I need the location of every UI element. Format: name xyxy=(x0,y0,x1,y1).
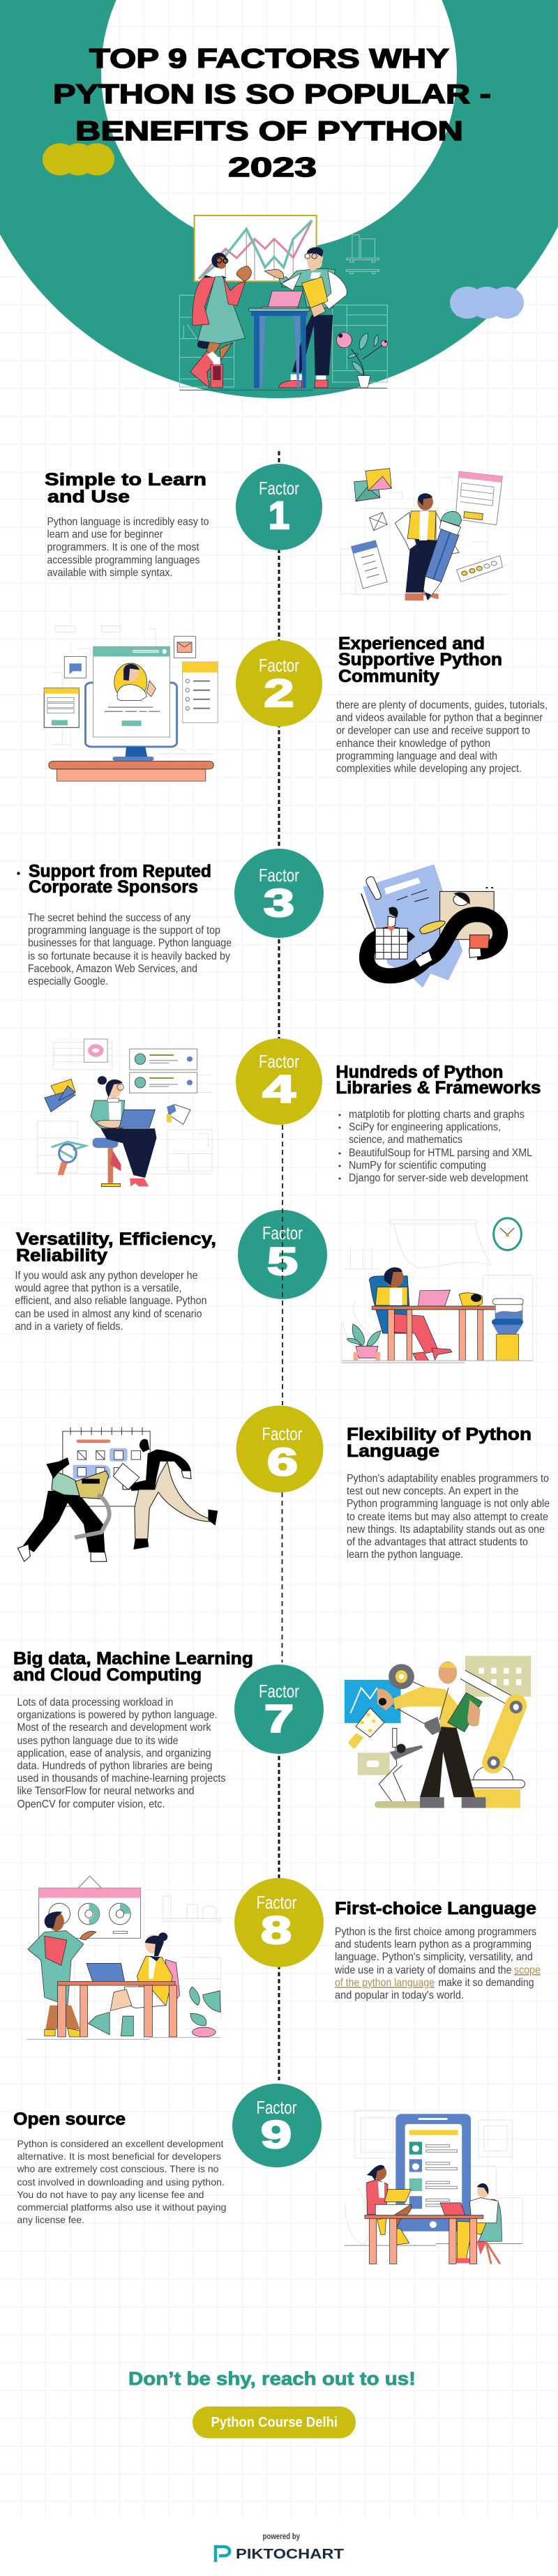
factor 4 text: Hundreds of Python xyxy=(336,1063,504,1082)
factor badge 6 xyxy=(236,1406,324,1492)
decorative yellow blob xyxy=(43,144,114,176)
factor badge 5: Factor xyxy=(262,1222,303,1243)
factor 6 text: test out new concepts. An expert in the xyxy=(347,1485,519,1497)
factor 5 text: and in a variety of fields. xyxy=(15,1321,123,1333)
factor 4 text: SciPy for engineering applications, xyxy=(349,1121,501,1133)
factor 3 text: programming language is the support of top xyxy=(28,925,220,937)
factor 2 text: programming language and deal with xyxy=(336,750,497,762)
timeline: dashed connector, factors 1 to 4 xyxy=(278,451,280,1038)
factor 6 text: Flexibility of Python xyxy=(347,1425,531,1444)
title xyxy=(53,44,491,183)
factor 8 text: and students learn python as a programming xyxy=(335,1939,531,1950)
factor 2 text: Supportive Python xyxy=(338,650,502,669)
factor 5 text: efficient, and also reliable language. Python xyxy=(15,1295,206,1307)
factor 1 text: available with simple syntax. xyxy=(47,567,173,579)
factor 1 text: learn and use for beginner xyxy=(47,529,163,540)
factor 2 text xyxy=(336,634,548,775)
timeline: dashed connector, factors 7 to 9 xyxy=(278,1756,280,2080)
factor badge 9: 9 xyxy=(261,2112,292,2156)
factor 3 illustration: handshake partners xyxy=(361,864,500,988)
button: Python Course Delhi xyxy=(193,2407,356,2438)
factor 2 text: Community xyxy=(338,667,439,686)
factor badge 3 xyxy=(234,849,324,938)
factor badge 2: 2 xyxy=(264,671,294,715)
factor 4 illustration: woman on laptop with library cards xyxy=(36,1039,212,1187)
factor badge 6: Factor xyxy=(262,1423,303,1444)
factor 8 text: language. Python's simplicity, versatility, and xyxy=(335,1951,533,1963)
factor 4 text: Django for server-side web development xyxy=(349,1172,529,1184)
factor 1 text xyxy=(45,470,209,579)
factor 9 text: Python is considered an excellent development xyxy=(17,2138,224,2149)
factor 5 text: If you would ask any python developer he xyxy=(15,1270,198,1282)
factor badge 2: Factor xyxy=(259,655,299,676)
factor 2 text: or developer can use and receive support to xyxy=(336,725,530,736)
factor 3 text: businesses for that language. Python language xyxy=(28,937,232,949)
factor 4 text: science, and mathematics xyxy=(349,1134,462,1146)
factor 8 text: First-choice Language xyxy=(335,1899,536,1918)
factor badge 9 xyxy=(232,2084,322,2167)
factor 7 text: application, ease of analysis, and organizing xyxy=(17,1748,211,1759)
factor 8 text: Python is the first choice among programmers xyxy=(335,1926,536,1938)
factor 5 text: Reliability xyxy=(16,1245,107,1265)
factor 1 text: and Use xyxy=(47,487,130,506)
factor 9 text: alternative. It is most beneficial for developers xyxy=(17,2151,221,2162)
factor 3 text: especially Google. xyxy=(28,976,108,987)
factor badge 4: Factor xyxy=(259,1051,299,1072)
factor badge 7: 7 xyxy=(264,1696,294,1741)
factor 3 text: The secret behind the success of any xyxy=(28,912,190,924)
factor 6 text xyxy=(347,1425,550,1561)
factor badge 4 xyxy=(236,1038,322,1125)
factor 8 text: wide use in a variety of domains and the xyxy=(334,1964,512,1976)
factor 4 text: matplotib for plotting charts and graphs xyxy=(349,1109,525,1121)
hero illustration: two colleagues at a chart board xyxy=(179,215,388,390)
factor 9 illustration: two people with giant phone xyxy=(345,2111,522,2264)
factor 8 text: and popular in today's world. xyxy=(335,1990,464,2001)
factor 7 illustration: engineer with robot arm xyxy=(345,1656,531,1808)
factor 2 illustration: profile on monitor xyxy=(44,626,218,781)
factor badge 1: Factor xyxy=(259,478,299,499)
factor badge 9: Factor xyxy=(257,2097,297,2118)
title: 2023 xyxy=(228,153,317,183)
factor 5 text: can be used in almost any kind of scenario xyxy=(15,1308,202,1320)
factor 1 text: Simple to Learn xyxy=(45,470,206,490)
factor 7 text: Most of the research and development work xyxy=(17,1722,211,1734)
title: BENEFITS OF PYTHON xyxy=(75,116,463,146)
title: TOP 9 FACTORS WHY xyxy=(89,44,449,74)
footer: powered by Piktochart: PIKTOCHART xyxy=(236,2547,344,2562)
factor 1 text: accessible programming languages xyxy=(47,554,200,566)
factor 9 text: commercial platforms also use it without paying xyxy=(17,2202,227,2213)
factor badge 3: 3 xyxy=(264,881,294,925)
factor badge 1 xyxy=(236,464,322,550)
factor badge 8 xyxy=(234,1878,324,1967)
factor 2 text: Experienced and xyxy=(338,634,485,653)
factor 6 text: learn the python language. xyxy=(347,1549,463,1561)
factor 7 text: uses python language due to its wide xyxy=(17,1735,179,1747)
factor 4 text: Libraries & Frameworks xyxy=(336,1078,541,1098)
factor badge 8: 8 xyxy=(261,1908,292,1952)
factor 7 text: OpenCV for computer vision, etc. xyxy=(17,1798,165,1810)
factor 7 text: and Cloud Computing xyxy=(13,1665,202,1685)
factor 3 text xyxy=(17,862,232,987)
factor 4 text xyxy=(336,1063,541,1184)
factor badge 1: 1 xyxy=(269,493,289,537)
footer: white band xyxy=(0,2520,558,2576)
decorative blue blob xyxy=(450,287,524,319)
factor 9 text: You do not have to pay any license fee and xyxy=(17,2189,204,2200)
factor 9 text: cost involved in downloading and using python. xyxy=(17,2176,225,2188)
factor 5 illustration: woman at desk xyxy=(342,1218,533,1363)
factor 4 text: NumPy for scientific computing xyxy=(349,1160,486,1172)
factor 3 text: is so fortunate because it is heavily backed by xyxy=(28,950,230,962)
button: Python Course Delhi: Python Course Delhi xyxy=(211,2415,338,2430)
factor badge 8: Factor xyxy=(257,1892,297,1913)
factor 2 text: and videos available for python that a beginner xyxy=(336,712,543,724)
factor 5 text: Versatility, Efficiency, xyxy=(16,1229,216,1249)
factor 2 text: enhance their knowledge of python xyxy=(336,738,490,750)
factor 3 text: Facebook, Amazon Web Services, and xyxy=(28,963,197,975)
factor 7 text: like TensorFlow for neural networks and xyxy=(17,1785,194,1797)
factor badge 7: Factor xyxy=(259,1681,299,1702)
factor 5 text: would agree that python is a versatile, xyxy=(15,1282,182,1294)
footer: powered by Piktochart xyxy=(216,2533,344,2562)
factor 3 text: Support from Reputed xyxy=(29,862,211,881)
factor badge 5: 5 xyxy=(267,1239,298,1283)
factor 1 text: programmers. It is one of the most xyxy=(47,541,199,554)
factor badge 6: 6 xyxy=(267,1439,298,1484)
factor 7 text: data. Hundreds of python libraries are being xyxy=(17,1760,212,1772)
factor 8 text: make it so demanding xyxy=(438,1977,534,1989)
factor badge 2 xyxy=(236,640,322,727)
factor 3 text: Corporate Sponsors xyxy=(29,877,198,897)
factor 7 text: Big data, Machine Learning xyxy=(13,1649,253,1668)
factor 7 text: organizations is powered by python language. xyxy=(17,1709,218,1721)
factor 6 text: Language xyxy=(347,1441,439,1461)
factor 5 text xyxy=(15,1229,216,1333)
factor 2 text: complexities while developing any project. xyxy=(336,763,522,775)
footer: powered by Piktochart: powered by xyxy=(262,2533,301,2541)
factor 7 text: used in thousands of machine-learning projects xyxy=(17,1773,226,1785)
factor 9 text xyxy=(13,2109,227,2225)
factor 9 text: who are extremely cost conscious. There is no xyxy=(16,2163,219,2174)
factor 9 text: any license fee. xyxy=(17,2214,84,2225)
factor 8 illustration: two women presenting charts xyxy=(27,1876,220,2039)
factor 8 text: of the python language xyxy=(335,1977,435,1989)
factor 6 text: of the advantages that attract students to xyxy=(347,1536,528,1548)
factor 1 text: Python language is incredibly easy to xyxy=(47,516,209,528)
hero background: teal ring xyxy=(0,0,558,398)
factor 4 text: BeautifulSoup for HTML parsing and XML xyxy=(349,1147,532,1159)
factor 1 illustration: man with giant pencil xyxy=(340,469,507,600)
factor 6 illustration: two people moving a calendar xyxy=(18,1427,218,1561)
factor badge 5 xyxy=(238,1210,327,1299)
call to action heading: Don’t be shy, reach out to us! xyxy=(128,2368,416,2389)
factor 7 text: Lots of data processing workload in xyxy=(17,1697,173,1709)
factor badge 4: 4 xyxy=(262,1067,296,1111)
title: PYTHON IS SO POPULAR - xyxy=(53,79,491,109)
factor 8 text: scope xyxy=(514,1964,541,1976)
factor 8 text xyxy=(334,1899,541,2001)
timeline: thin dashed connector, factors 4 to 7 xyxy=(282,1125,283,1662)
factor 7 text xyxy=(13,1649,253,1810)
factor 9 text: Open source xyxy=(13,2109,126,2129)
factor badge 3: Factor xyxy=(259,865,299,886)
factor badge 7 xyxy=(234,1665,324,1754)
